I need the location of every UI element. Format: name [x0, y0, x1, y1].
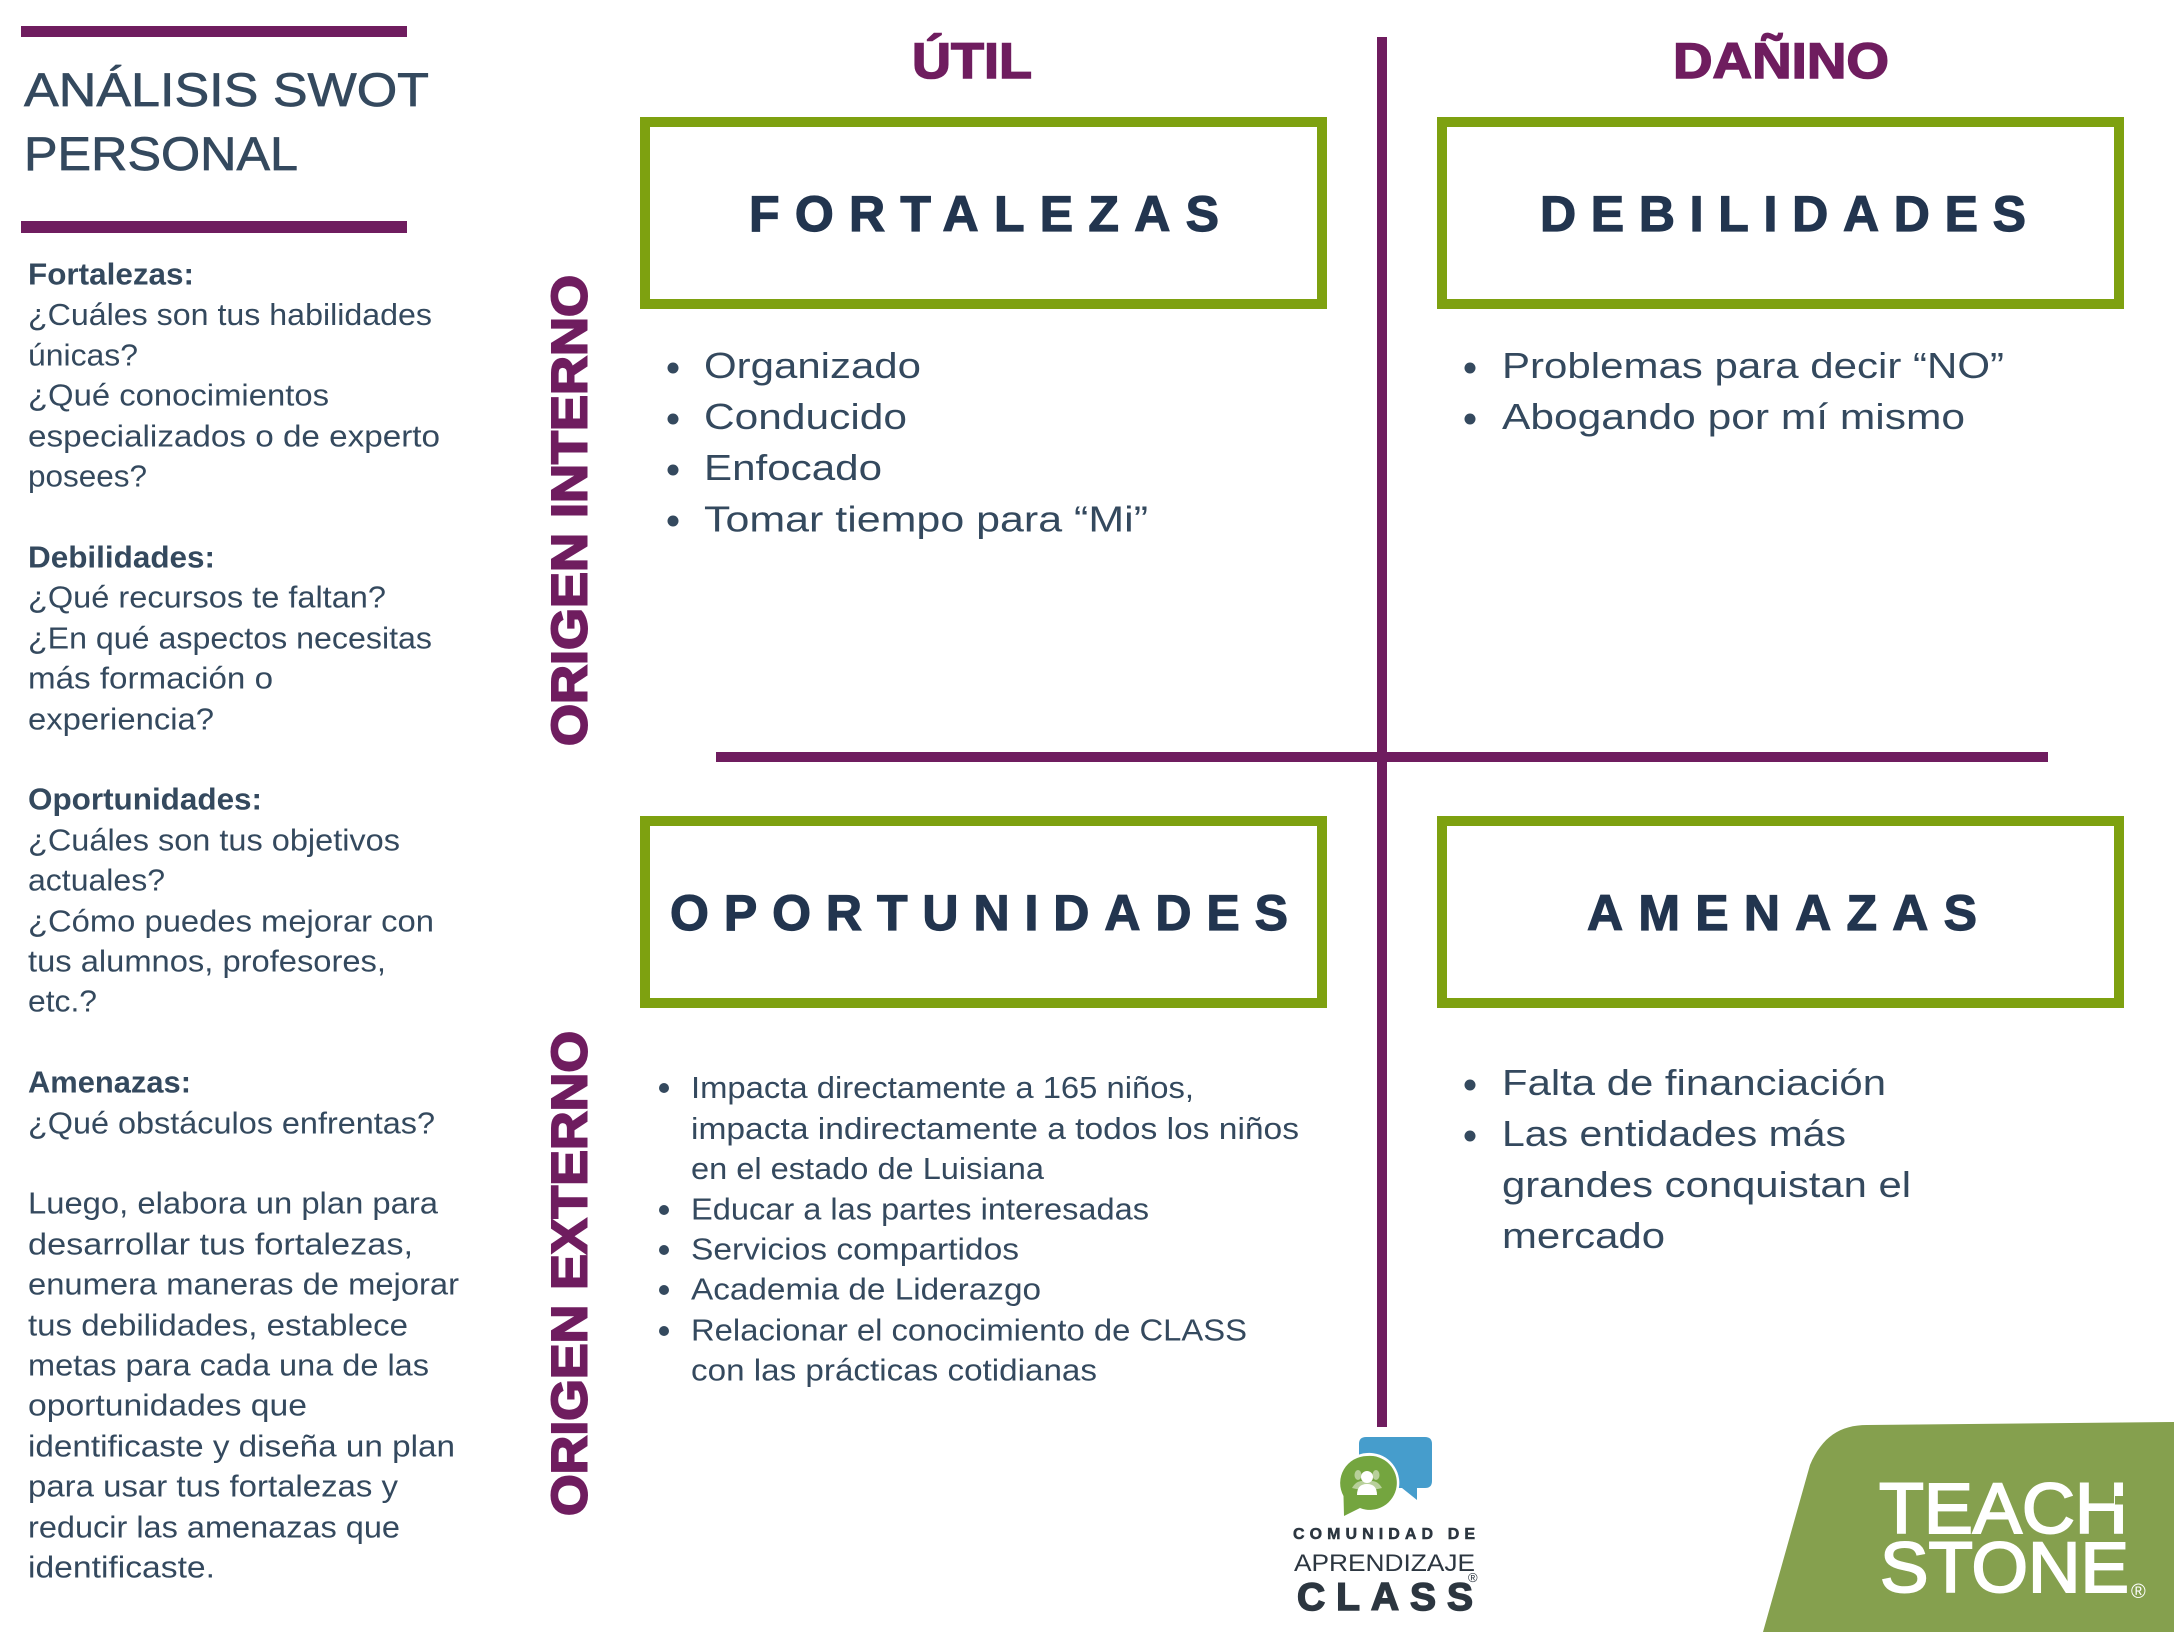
left column instructions: desarrollar tus fortalezas,: [28, 1226, 413, 1262]
list: amenazas: Las entidades más: [1502, 1113, 1846, 1154]
left column instructions: ¿Cómo puedes mejorar con: [28, 904, 434, 938]
left column instructions: tus debilidades, establece: [28, 1308, 408, 1342]
left column instructions: oportunidades que: [28, 1388, 307, 1422]
panel: debilidades: DEBILIDADES: [1540, 186, 2026, 242]
title: PERSONAL: [24, 127, 298, 180]
list: oportunidades: Impacta directamente a 165 niños,: [691, 1070, 1194, 1105]
left column instructions: únicas?: [28, 338, 138, 372]
list: oportunidades: Academia de Liderazgo: [691, 1272, 1041, 1306]
vertical axis: [1377, 37, 1387, 1427]
left column instructions: Debilidades:: [28, 540, 215, 574]
left column instructions: ¿Qué obstáculos enfrentas?: [28, 1106, 435, 1140]
panel: amenazas: [1442, 821, 2119, 1003]
left column instructions: identificaste.: [28, 1550, 215, 1584]
left column instructions: metas para cada una de las: [28, 1348, 429, 1382]
list: fortalezas: Conducido: [704, 396, 907, 437]
list: fortalezas: Organizado: [704, 345, 921, 386]
panel: fortalezas: FORTALEZAS: [749, 186, 1219, 242]
list: fortalezas: Tomar tiempo para “Mi”: [704, 498, 1148, 540]
list: oportunidades: con las prácticas cotidianas: [691, 1352, 1097, 1388]
list: fortalezas: [668, 345, 1148, 540]
list: amenazas: [1464, 1062, 1911, 1256]
list: debilidades: Abogando por mí mismo: [1502, 396, 1965, 437]
left column instructions: especializados o de experto: [28, 418, 440, 454]
left column instructions: enumera maneras de mejorar: [28, 1266, 459, 1302]
logo: teachstone: ®: [2131, 1581, 2146, 1603]
title block: [21, 26, 429, 233]
left column instructions: actuales?: [28, 862, 165, 898]
panel: oportunidades: OPORTUNIDADES: [670, 885, 1288, 941]
left column instructions: más formación o: [28, 660, 273, 696]
left column instructions: [28, 256, 459, 1584]
list: amenazas: grandes conquistan el: [1502, 1164, 1911, 1205]
title: ANÁLISIS SWOT: [24, 63, 429, 116]
list: oportunidades: Servicios compartidos: [691, 1232, 1019, 1266]
left column instructions: posees?: [28, 458, 147, 494]
panel: amenazas: AMENAZAS: [1587, 885, 1977, 941]
title: [24, 63, 429, 180]
left column instructions: Fortalezas:: [28, 256, 194, 292]
left column instructions: tus alumnos, profesores,: [28, 944, 386, 978]
list: fortalezas: Enfocado: [704, 447, 882, 488]
list: oportunidades: [659, 1070, 1299, 1388]
list: amenazas: mercado: [1502, 1215, 1665, 1256]
panel: oportunidades: [645, 821, 1322, 1003]
logo: comunidad de aprendizaje class: ®: [1468, 1570, 1478, 1585]
icon: blue speech bubble: [1359, 1437, 1432, 1500]
logo: teachstone: TEACH: [1879, 1470, 2128, 1549]
logo: teachstone: STONE: [1880, 1529, 2129, 1608]
list: oportunidades: impacta indirectamente a todos los niños: [691, 1111, 1299, 1146]
left column instructions: ¿Cuáles son tus objetivos: [28, 822, 400, 858]
icon: people: [1352, 1470, 1382, 1495]
horizontal axis: [716, 752, 2048, 762]
left column instructions: Oportunidades:: [28, 782, 262, 816]
left column instructions: reducir las amenazas que: [28, 1510, 400, 1544]
list: oportunidades: Educar a las partes interesadas: [691, 1192, 1149, 1226]
list: amenazas: Falta de financiación: [1502, 1062, 1886, 1103]
column heading: dañino: DAÑINO: [1673, 33, 1889, 89]
logo: comunidad de aprendizaje class: CLASS: [1297, 1576, 1473, 1619]
list: oportunidades: Relacionar el conocimiento de CLASS: [691, 1312, 1247, 1348]
list: debilidades: [1464, 345, 2004, 437]
list: oportunidades: en el estado de Luisiana: [691, 1151, 1045, 1186]
left column instructions: ¿Qué conocimientos: [28, 378, 329, 412]
logo: comunidad de aprendizaje class: COMUNIDAD DE: [1293, 1526, 1475, 1543]
left column instructions: experiencia?: [28, 702, 214, 736]
list: debilidades: Problemas para decir “NO”: [1502, 345, 2004, 386]
row label: origen externo: ORIGEN EXTERNO: [542, 1031, 598, 1516]
panel: fortalezas: [645, 122, 1322, 304]
left column instructions: Luego, elabora un plan para: [28, 1186, 439, 1220]
left column instructions: ¿Cuáles son tus habilidades: [28, 297, 432, 332]
left column instructions: para usar tus fortalezas y: [28, 1468, 399, 1504]
icon: green speech bubble: [1339, 1453, 1399, 1520]
panel: debilidades: [1442, 122, 2119, 304]
logo: teachstone: [1763, 1422, 2174, 1632]
left column instructions: ¿Qué recursos te faltan?: [28, 580, 386, 614]
logo: comunidad de aprendizaje class: APRENDIZAJE: [1294, 1550, 1475, 1577]
row label: origen interno: ORIGEN INTERNO: [542, 275, 598, 746]
logo: comunidad de aprendizaje class: [1293, 1437, 1478, 1619]
left column instructions: identificaste y diseña un plan: [28, 1428, 455, 1464]
left column instructions: etc.?: [28, 984, 97, 1018]
column heading: útil: ÚTIL: [912, 33, 1032, 89]
left column instructions: Amenazas:: [28, 1064, 191, 1100]
left column instructions: ¿En qué aspectos necesitas: [28, 620, 432, 656]
